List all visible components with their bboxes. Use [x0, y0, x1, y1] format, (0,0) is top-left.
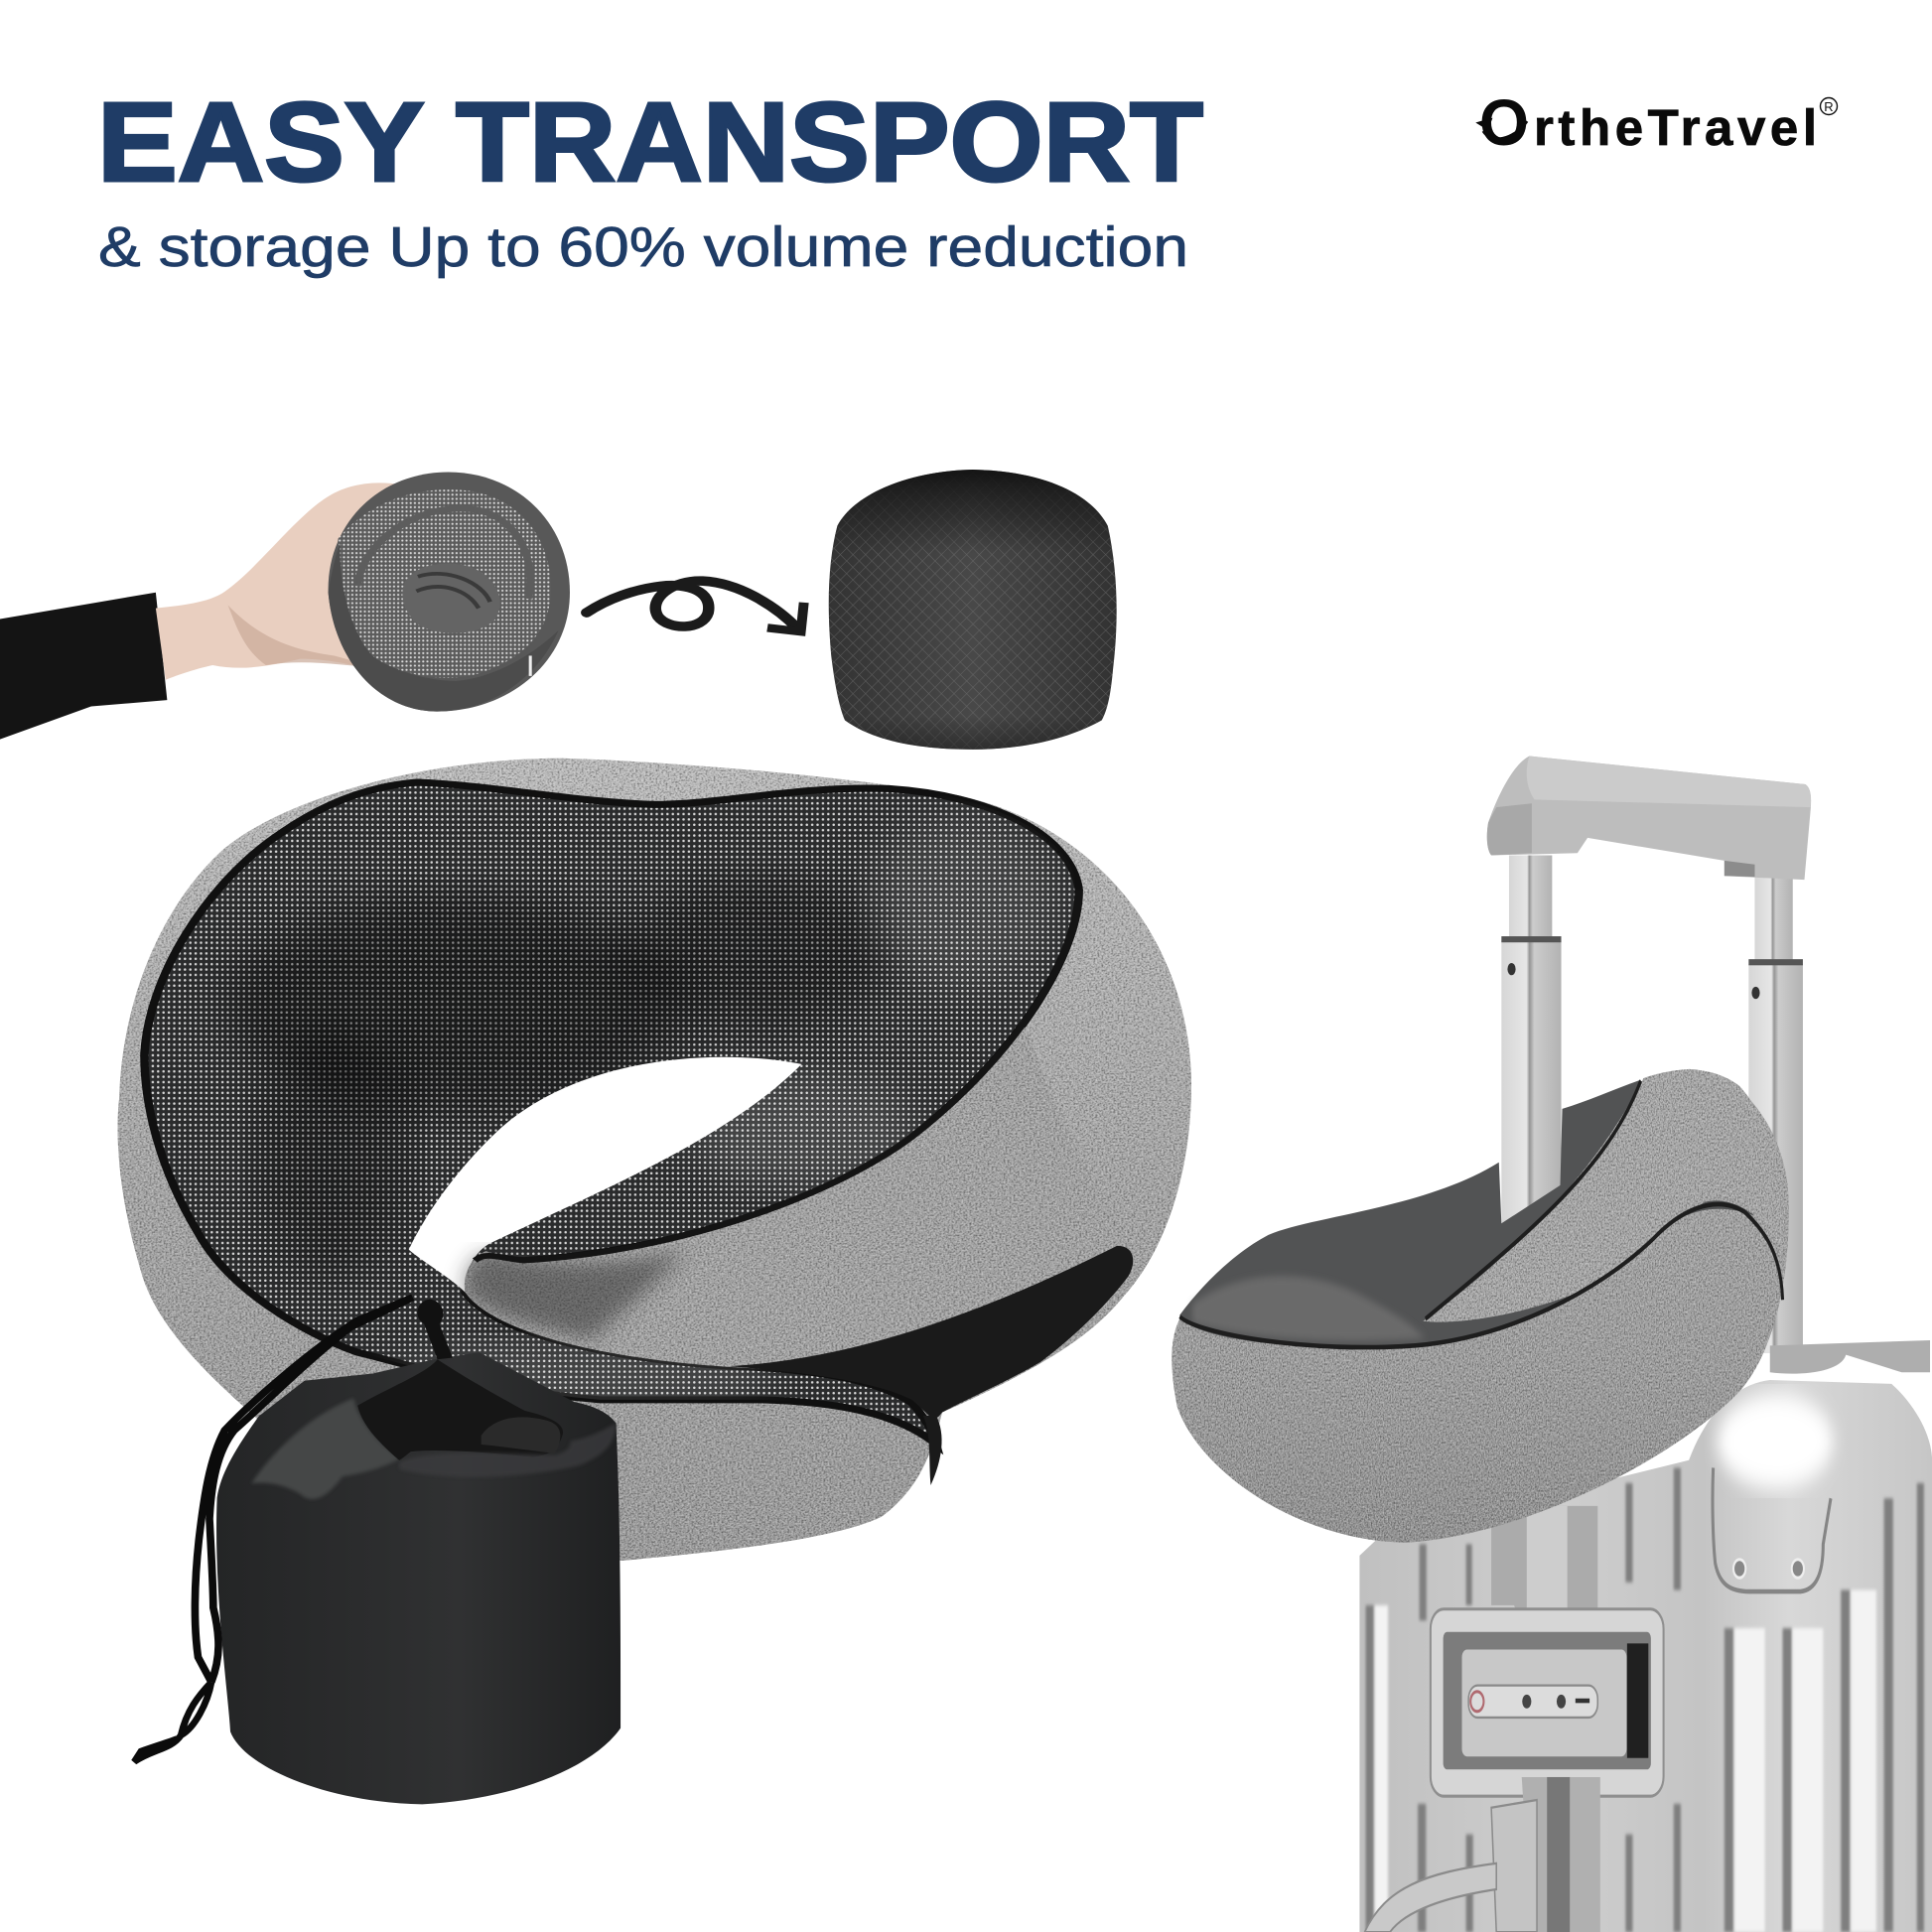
bag shoulder highlight	[251, 1399, 399, 1499]
suitcase ribs	[1366, 1467, 1924, 1932]
sleeve	[0, 593, 167, 740]
lobe shadow	[465, 1251, 684, 1339]
lock surround	[1431, 1609, 1664, 1796]
combination lock	[1431, 1609, 1664, 1796]
left handle pole	[1501, 856, 1562, 1246]
bag gathered top and base shading	[829, 470, 1117, 750]
logo globe letter: O	[1479, 85, 1529, 159]
roll outer shell	[329, 473, 570, 712]
rolled pillow	[329, 473, 570, 712]
bag inner fold	[482, 1417, 560, 1453]
lower strap and latch	[1365, 1777, 1600, 1932]
pillow fabric	[117, 759, 1191, 1561]
hand	[156, 483, 410, 680]
black tab strip	[730, 1246, 1133, 1419]
title: EASY TRANSPORT	[97, 79, 1203, 205]
lobe edge	[475, 890, 1079, 1261]
handle grip	[1487, 757, 1811, 880]
logo swoosh	[1479, 120, 1527, 139]
roll centre fold	[402, 563, 500, 633]
subtitle: & storage Up to 60% volume reduction	[98, 215, 1188, 279]
hung pillow seat mesh	[1179, 1080, 1754, 1347]
suitcase body	[1359, 1380, 1932, 1932]
logo registered mark	[1821, 97, 1837, 115]
hung pillow lip highlight	[1192, 1276, 1426, 1341]
hung pillow fabric	[1172, 1069, 1789, 1543]
lock dials	[1468, 1686, 1597, 1718]
tail end shadow	[923, 1416, 942, 1485]
roll left shadow	[329, 542, 558, 712]
zipper pull	[528, 655, 532, 676]
main neck pillow	[117, 759, 1191, 1561]
drawstring tail	[134, 1682, 211, 1762]
right handle pole	[1748, 876, 1803, 1353]
lock body	[1462, 1650, 1626, 1756]
logo registered mark: R	[1824, 99, 1834, 114]
logo wordmark: rtheTravel	[1534, 99, 1817, 156]
bag opening	[357, 1359, 563, 1460]
pillow hanging on luggage	[1172, 1069, 1789, 1543]
luggage with telescopic handle	[1359, 757, 1932, 1932]
roll coil groove	[357, 508, 530, 599]
hung pillow fold	[1423, 1069, 1785, 1322]
hand shadow	[228, 605, 380, 668]
suitcase corner highlight	[1717, 1394, 1834, 1488]
black bag body	[216, 1352, 621, 1804]
arrow	[587, 581, 804, 631]
corner plate	[1713, 1467, 1831, 1591]
bag rim	[399, 1424, 616, 1477]
black drawstring bag	[134, 1298, 621, 1804]
suitcase top bar	[1770, 1340, 1930, 1374]
bag body	[829, 470, 1117, 750]
hand rolling the pillow	[0, 473, 570, 740]
toggle	[417, 1300, 453, 1359]
bag diamond net	[829, 470, 1117, 750]
centre strap	[1491, 1506, 1597, 1628]
mesh shading	[228, 814, 1056, 1416]
mesh panel	[144, 782, 1079, 1445]
roll inner coil	[372, 516, 522, 646]
roll mesh	[338, 489, 551, 678]
mesh storage bag	[829, 470, 1117, 750]
suitcase rib highlights	[1375, 1590, 1876, 1932]
pillow hole	[409, 1057, 801, 1292]
drawstring	[195, 1298, 413, 1682]
hung pillow edge lines	[1179, 1080, 1783, 1347]
logo	[1479, 85, 1837, 159]
inner lower fabric lobe	[465, 890, 1132, 1369]
